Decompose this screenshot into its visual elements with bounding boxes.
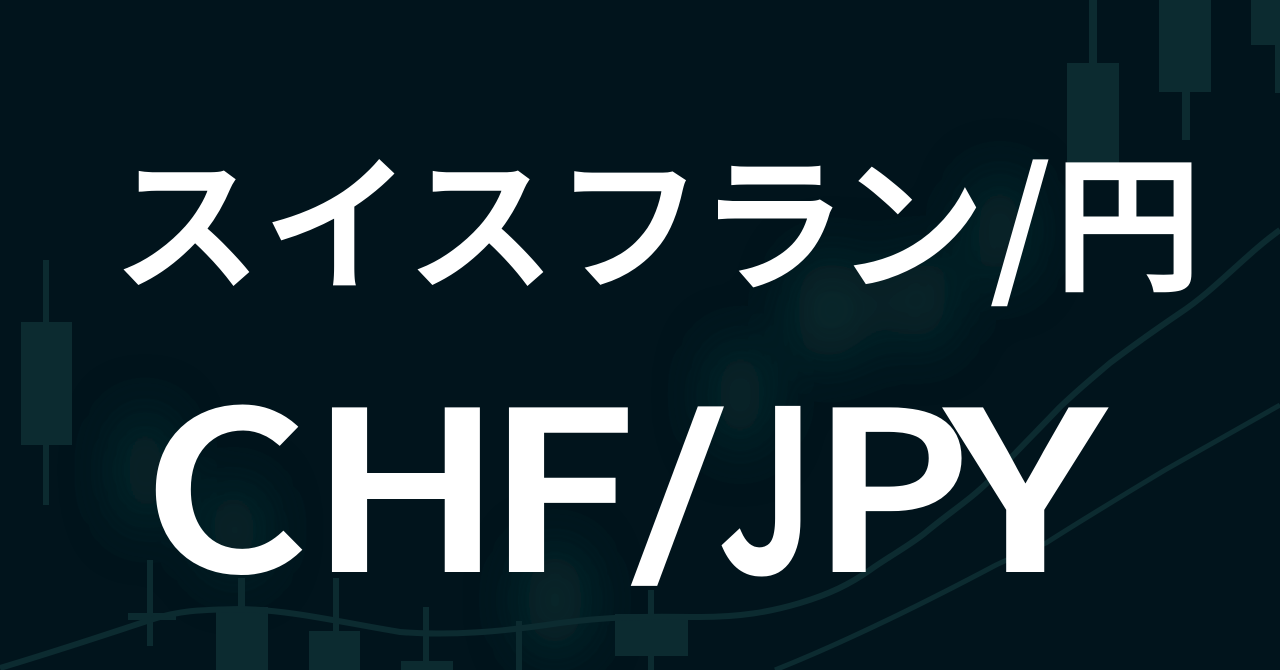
title: currency pair	[144, 317, 1105, 634]
title: currency pair: H	[309, 318, 503, 633]
title: currency pair: F	[486, 318, 634, 633]
candlestick chart: left	[21, 260, 72, 505]
title: currency pair: C	[144, 317, 307, 633]
background glows	[121, 175, 1026, 655]
trend line: upper	[0, 230, 1280, 668]
title: currency pair: P	[811, 317, 971, 633]
title: Japanese: スイスフラン/円	[114, 110, 1201, 321]
trend line: lower	[775, 405, 1280, 670]
candlestick chart: bottom	[128, 560, 688, 670]
title: currency pair: /	[627, 342, 731, 606]
title: currency pair: Y	[946, 317, 1105, 633]
title: currency pair: J	[720, 318, 813, 634]
candlestick chart: top right	[1067, 0, 1280, 168]
